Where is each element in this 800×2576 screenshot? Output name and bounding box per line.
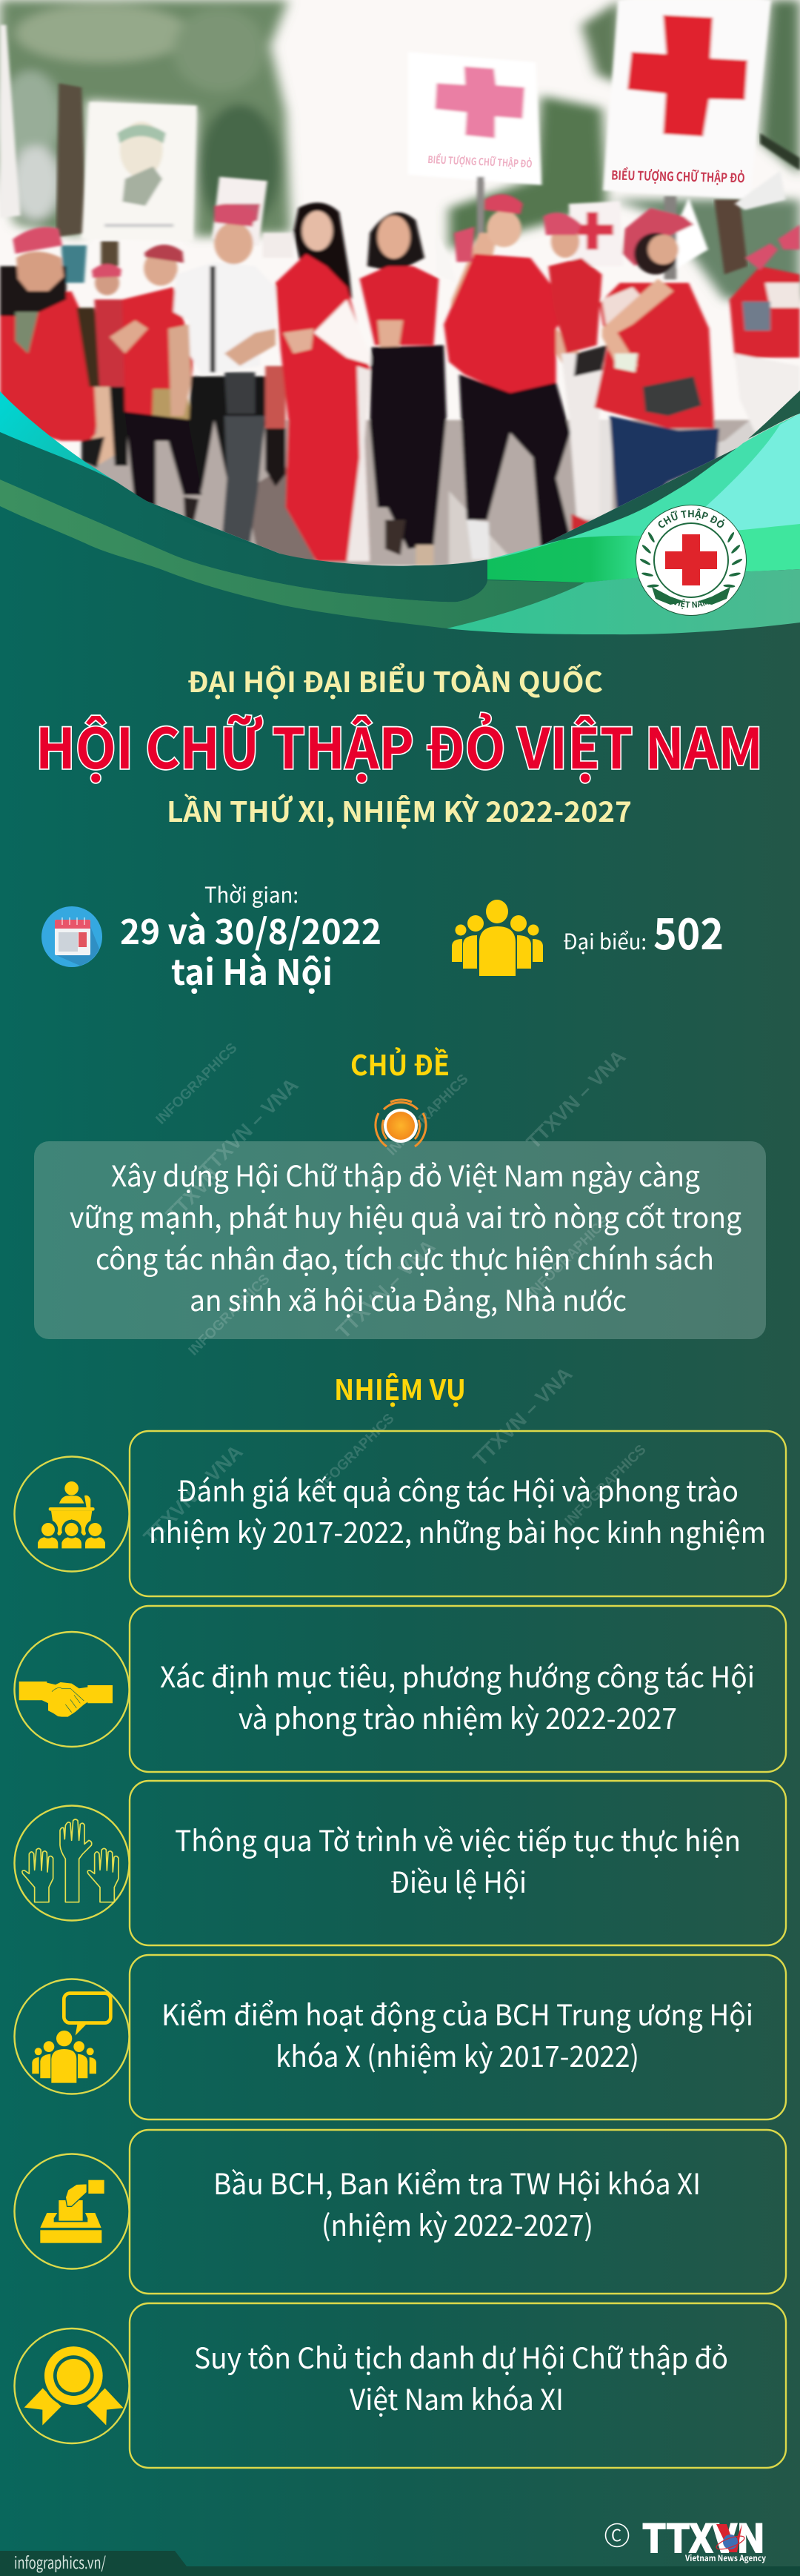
lower green band [447,569,800,634]
watermarks on page: TTXVN – VNA [522,1046,630,1153]
icon: calendar [41,906,102,967]
task 1 text: Đánh giá kết quả công tác Hội và phong trào [177,1469,739,1510]
task 4 text: Kiểm điểm hoạt động của BCH Trung ương Hội [161,1993,753,2034]
green wedge [487,524,800,582]
task 6 text: Việt Nam khóa XI [350,2377,564,2419]
task 1 text [149,1469,766,1552]
icon: medal [24,2344,124,2426]
man white shirt [173,262,276,374]
icon ring 4 [15,1979,129,2094]
logo: Red Cross of Vietnam: VIỆT NAM [674,599,709,609]
woman in ao dai [293,202,352,299]
task 2 [15,1606,786,1772]
watermarks on page [139,1040,650,1548]
logo: Red Cross of Vietnam: CHỮ THẬP ĐỎ [658,508,724,528]
time block: Thời gian: [204,878,299,909]
icon ring 6 [15,2328,129,2443]
task 3 text: Điều lệ Hội [390,1860,527,1902]
task 4 [15,1955,786,2119]
heading line 1: ĐẠI HỘI ĐẠI BIỂU TOÀN QUỐC [187,660,603,700]
card 1 [130,1431,786,1596]
task 4 text [161,1993,753,2076]
logo: Red Cross of Vietnam [636,505,747,616]
icon: people with speech bubble [32,1994,110,2083]
icon: handshake [19,1682,113,1717]
delegates count: 502 [653,900,724,962]
card 2 [130,1606,786,1772]
person 2 [94,299,127,387]
sign caption text pink: BIỂU TƯỢNG CHỮ THẬP ĐỎ [427,152,533,170]
watermarks on page: INFOGRAPHICS [310,1411,398,1498]
heading: tasks: NHIỆM VỤ [334,1367,466,1408]
theme panel: Xây dựng Hội Chữ thập đỏ Việt Nam ngày càng [111,1154,700,1195]
time block: 29 và 30/8/2022 [120,903,381,955]
theme panel: an sinh xã hội của Đảng, Nhà nước [190,1278,627,1320]
woman right [622,208,694,266]
watermarks on page: INFOGRAPHICS [186,1272,273,1359]
watermarks on page: TTXVN – VNA [332,1235,439,1343]
heading line 3: LẦN THỨ XI, NHIỆM KỲ 2022-2027 [167,789,632,830]
title block [36,660,763,830]
task 3 [15,1781,786,1945]
time block [120,878,381,995]
main title: HỘI CHỮ THẬP ĐỎ VIỆT NAM [36,704,763,785]
task 2 text [160,1655,755,1738]
signs [0,25,21,218]
icon ring 2 [15,1632,129,1747]
task 5 text [213,2162,701,2245]
delegates count: Đại biểu: [563,925,647,956]
card 5 [130,2130,786,2294]
theme panel: vững mạnh, phát huy hiệu quả vai trò nòng cốt trong [70,1195,741,1237]
far right person [730,266,800,358]
light mint highlight [667,414,800,537]
dark teal curve [0,432,487,602]
icon: raised hands [22,1819,119,1902]
ground [87,420,750,565]
watermarks on page: TTXVN – VNA [195,1074,302,1181]
task 2 text: Xác định mục tiêu, phương hướng công tác Hội [160,1655,755,1696]
dark corner [748,391,800,439]
icon: sun target [376,1100,426,1146]
icon: delegates [452,900,543,976]
card 3 [130,1781,786,1945]
task 1 text: nhiệm kỳ 2017-2022, những bài học kinh nghiệm [149,1510,766,1552]
theme panel: công tác nhân đạo, tích cực thực hiện chính sách [96,1237,714,1278]
person 3 [122,287,194,416]
task 5 text: Bầu BCH, Ban Kiểm tra TW Hội khóa XI [213,2162,701,2203]
task 2 text: và phong trào nhiệm kỳ 2022-2027 [239,1696,677,1738]
task 6 text [194,2336,728,2419]
card 6 [130,2303,786,2468]
watermarks on page: INFOGRAPHICS [384,1072,472,1159]
watermarks on page: INFOGRAPHICS [562,1442,650,1530]
copyright and agency logo: TTXVN [642,2508,765,2563]
copyright and agency logo: Vietnam News Agency [684,2552,766,2564]
task 3 text [175,1819,741,1902]
task 6 text: Suy tôn Chủ tịch danh dự Hội Chữ thập đỏ [194,2336,728,2377]
icon: speaker and audience [38,1481,105,1548]
woman big red shirt [449,231,496,308]
footer url: infographics.vn/ [14,2550,106,2574]
task 5 [15,2130,786,2294]
task 6 [15,2303,786,2468]
crowd heads/shadows right [454,227,474,262]
woman behind [548,258,602,353]
task 3 text: Thông qua Tờ trình về việc tiếp tục thực hiện [175,1819,741,1860]
mint layer [487,414,800,560]
delegates count [563,900,724,962]
task 5 text: (nhiệm kỳ 2022-2027) [321,2203,593,2245]
icon ring 3 [15,1805,129,1921]
heading: theme: CHỦ ĐỀ [350,1043,450,1083]
person 1 [0,291,102,441]
icon ring 5 [15,2154,129,2269]
footer strip [0,2551,800,2576]
theme panel [34,1040,766,1548]
icon: ballot box [40,2180,104,2243]
woman black pants [367,213,424,270]
time block: tại Hà Nội [171,944,333,995]
watermarks on page: TTXVN – VNA [469,1363,576,1470]
header photo: Red Cross delegates marching [0,0,800,578]
watermarks on page: TTXVN – VNA [139,1441,247,1548]
icon ring 1 [15,1457,129,1571]
task 1 [15,1431,786,1596]
copyright and agency logo: C [611,2523,621,2546]
decorative curved layers: left teal wedge [0,391,116,491]
task 4 text: khóa X (nhiệm kỳ 2017-2022) [276,2034,639,2076]
green stripe curve [0,479,585,628]
card 4 [130,1955,786,2119]
watermarks on page: INFOGRAPHICS [525,1214,613,1301]
watermarks on page: INFOGRAPHICS [153,1040,241,1128]
watermarks on page: TTXVN [161,1163,224,1226]
